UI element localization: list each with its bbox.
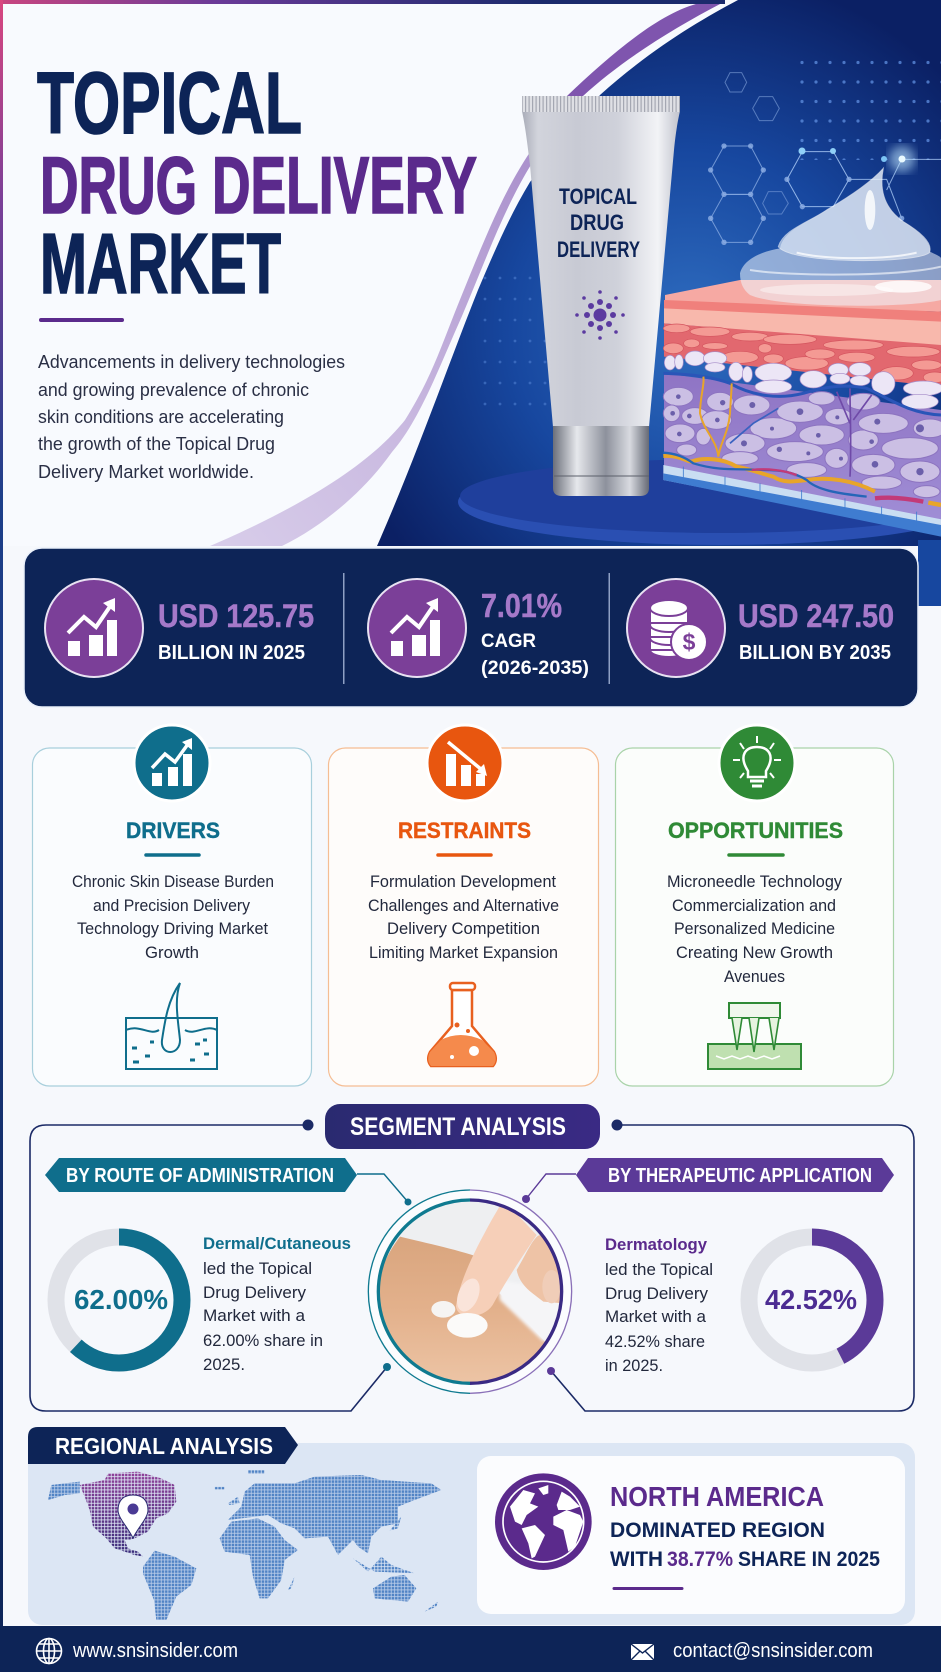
heading rule [729, 853, 783, 857]
tube label: TOPICAL [559, 184, 637, 209]
heading badge: REGIONAL ANALYSIS [55, 1433, 273, 1459]
icon: hair follicle [126, 983, 217, 1069]
tube label: DRUG [570, 210, 624, 235]
KPI: CAGR [368, 579, 589, 679]
title: DRUG DELIVERY [40, 141, 477, 231]
body text [667, 872, 842, 986]
segment text: dermal [203, 1234, 351, 1374]
heading badge [28, 1427, 298, 1464]
donut: 42.52%: 42.52% [765, 1284, 857, 1315]
panel: restraints [328, 725, 598, 1086]
title: MARKET [40, 217, 281, 312]
body text: Personalized Medicine [674, 919, 835, 938]
footer [0, 1626, 941, 1672]
world map [48, 1470, 441, 1620]
donut: 42.52% [749, 1237, 875, 1363]
body text: Chronic Skin Disease Burden [72, 872, 274, 891]
KPI: CAGR: (2026-2035) [481, 658, 589, 679]
panel: segment analysis [30, 1104, 914, 1411]
tube crimp [522, 96, 680, 112]
segment text: dermal: 2025. [203, 1355, 245, 1374]
title [37, 55, 477, 312]
ribbon: route of administration [45, 1158, 357, 1192]
callout text: 38.77% [667, 1548, 733, 1571]
KPI: market size 2035: $ [683, 629, 696, 655]
intro paragraph: Advancements in delivery technologies [38, 351, 345, 372]
KPI: market size 2035: USD 247.50 [738, 598, 894, 634]
website: www.snsinsider.com [72, 1640, 238, 1662]
photo: cream application [368, 1190, 572, 1393]
KPI: CAGR: 7.01% [481, 587, 562, 624]
callout text: NORTH AMERICA [610, 1481, 824, 1512]
connector dots [302, 1120, 622, 1130]
callout rule [614, 1587, 682, 1590]
body text: Technology Driving Market [77, 919, 268, 938]
divider [343, 573, 344, 684]
segment text: dermal: Dermal/Cutaneous [203, 1234, 351, 1253]
heading rule [438, 853, 491, 857]
display platform [458, 459, 941, 545]
illustration: gel dollop [740, 168, 941, 306]
intro paragraph: the growth of the Topical Drug [38, 433, 275, 454]
blue vessel [663, 373, 941, 415]
heading: RESTRAINTS [398, 818, 531, 843]
body text [368, 872, 559, 962]
purple cells [663, 387, 941, 498]
KPI: CAGR: CAGR [481, 631, 536, 652]
yellow vessels [700, 377, 732, 457]
segment text: dermatology: 42.52% share [605, 1332, 705, 1351]
segment text: dermal: 62.00% share in [203, 1331, 323, 1350]
KPI: market size 2025 [45, 579, 314, 677]
intro paragraph: Delivery Market worldwide. [38, 461, 254, 482]
title: TOPICAL [37, 55, 302, 152]
pale layer [664, 303, 941, 347]
KPI: market size 2035 [627, 579, 894, 677]
segment text: dermatology: Dermatology [605, 1235, 708, 1254]
heading pill [325, 1104, 600, 1149]
panel: regional analysis [28, 1427, 915, 1625]
icon: declining chart [427, 725, 503, 801]
purple base [664, 373, 941, 527]
body text: Microneedle Technology [667, 872, 842, 891]
top surface [665, 280, 941, 312]
ribbon: therapeutic application: BY THERAPEUTIC APPLICATION [608, 1165, 872, 1187]
heading rule [146, 853, 199, 857]
callout text [610, 1481, 880, 1571]
connector: right [522, 1174, 576, 1375]
tube logo [575, 290, 625, 340]
icon: flask [428, 983, 496, 1066]
hexagon network [708, 73, 941, 245]
body text: Delivery Competition [387, 919, 540, 938]
intro paragraph [38, 351, 345, 482]
callout card [477, 1456, 905, 1614]
icon: web globe [36, 1638, 62, 1664]
segment text: dermatology: led the Topical [605, 1260, 713, 1279]
segment text: dermal: Market with a [203, 1306, 306, 1325]
segment text: dermatology [605, 1235, 713, 1375]
illustration: skin cross-section [663, 280, 941, 547]
email: contact@snsinsider.com [673, 1640, 873, 1662]
body text: Avenues [724, 967, 785, 986]
heading pill: SEGMENT ANALYSIS [350, 1113, 566, 1141]
segment text: dermal: led the Topical [203, 1259, 312, 1278]
map: north america highlighted [80, 1472, 176, 1557]
product tube [522, 96, 680, 496]
body text [72, 872, 274, 962]
body text: and Precision Delivery [93, 896, 250, 915]
KPI: market size 2025: USD 125.75 [158, 598, 314, 634]
red cell layer [664, 323, 941, 387]
ribbon: therapeutic application [576, 1158, 894, 1192]
segment text: dermatology: Market with a [605, 1307, 707, 1326]
intro paragraph: skin conditions are accelerating [38, 406, 284, 427]
tube label [557, 184, 640, 262]
icon: globe [495, 1473, 592, 1570]
section outline [30, 1125, 914, 1411]
body text: Limiting Market Expansion [369, 943, 558, 962]
divider [608, 573, 610, 684]
hero background [0, 0, 941, 606]
panel: opportunities [616, 725, 894, 1086]
curved accent band [210, 3, 722, 546]
segment text: dermatology: in 2025. [605, 1356, 663, 1375]
map pin [118, 1495, 148, 1538]
ribbon: route of administration: BY ROUTE OF ADMINISTRATION [66, 1165, 334, 1187]
callout text: WITH [610, 1548, 663, 1571]
pale blue base [663, 465, 941, 535]
donut: 62.00% [56, 1237, 182, 1363]
body text: Growth [145, 943, 199, 962]
KPI: market size 2025: BILLION IN 2025 [158, 642, 305, 664]
segment text: dermal: Drug Delivery [203, 1283, 306, 1302]
icon: growth chart [134, 725, 210, 801]
intro paragraph: and growing prevalence of chronic [38, 379, 309, 400]
body text: Challenges and Alternative [368, 896, 559, 915]
body text: Creating New Growth [676, 943, 833, 962]
title underline [39, 318, 124, 322]
connector: left [357, 1174, 412, 1371]
icon: microneedle patch [708, 1003, 801, 1069]
callout text: SHARE IN 2025 [738, 1548, 880, 1571]
KPI: market size 2035: BILLION BY 2035 [739, 642, 891, 664]
body text: Formulation Development [370, 872, 556, 891]
KPI band [24, 548, 918, 707]
donut: 62.00%: 62.00% [74, 1284, 168, 1315]
heading: OPPORTUNITIES [668, 818, 843, 843]
top accent bar [0, 0, 725, 4]
lavender upper cells [664, 351, 941, 409]
segment text: dermatology: Drug Delivery [605, 1284, 708, 1303]
panel: drivers [32, 725, 312, 1086]
glow nodes [798, 146, 915, 172]
callout text: DOMINATED REGION [610, 1519, 825, 1542]
body text: Commercialization and [672, 896, 836, 915]
icon: light bulb [719, 725, 795, 801]
tube cap [553, 426, 649, 496]
tube label: DELIVERY [557, 237, 640, 262]
left accent stripe [0, 0, 3, 1672]
icon: envelope [631, 1644, 654, 1660]
heading: DRIVERS [126, 818, 220, 843]
